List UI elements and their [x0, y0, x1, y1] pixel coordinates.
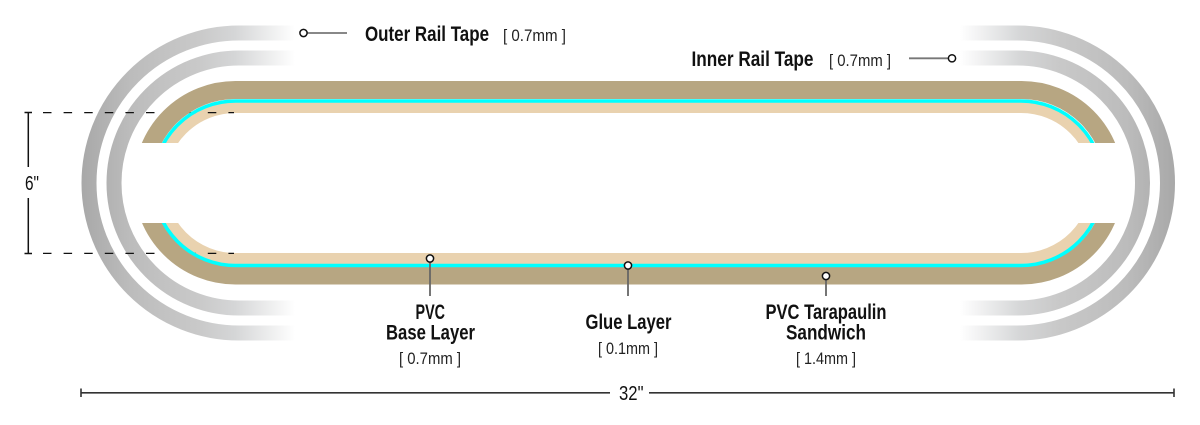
inner rail tape: left — [114, 58, 295, 308]
dimension: 32 inch width: 32" — [619, 383, 644, 405]
callout: outer rail tape: Outer Rail Tape — [365, 23, 489, 46]
dashed guide lines for 6 inch dimension — [43, 113, 234, 253]
callout: pvc tarpaulin sandwich — [766, 272, 886, 368]
callout: pvc tarpaulin sandwich: Sandwich — [786, 322, 866, 344]
callout: pvc tarpaulin sandwich: PVC Tarapaulin — [766, 301, 886, 324]
dimension: 6 inch height — [24, 112, 39, 254]
callout: glue layer: [ 0.1mm ] — [598, 339, 658, 358]
outer rail tape: right — [960, 33, 1168, 333]
callout: pvc base layer: [ 0.7mm ] — [399, 349, 461, 368]
inner rail tape: right — [960, 58, 1142, 308]
callout: inner rail tape: [ 0.7mm ] — [829, 51, 891, 70]
dimension: 6 inch height: 6" — [25, 173, 39, 195]
outer rail tape: left — [89, 33, 295, 333]
callout: pvc tarpaulin sandwich: [ 1.4mm ] — [796, 349, 856, 368]
callout: pvc base layer: PVC — [416, 301, 445, 324]
callout: outer rail tape: [ 0.7mm ] — [503, 26, 566, 45]
dimension: 32 inch width — [81, 383, 1174, 405]
pvc base layer band — [160, 108, 1096, 258]
callout: inner rail tape: Inner Rail Tape — [692, 48, 814, 71]
callout: glue layer: Glue Layer — [586, 311, 672, 334]
callout: glue layer — [586, 262, 672, 358]
callout: inner rail tape — [692, 48, 956, 71]
pvc tarpaulin sandwich band — [143, 90, 1114, 276]
callout: outer rail tape — [300, 23, 566, 46]
glue layer band — [154, 101, 1103, 266]
callout: pvc base layer — [386, 255, 475, 368]
callout: pvc base layer: Base Layer — [386, 322, 475, 344]
